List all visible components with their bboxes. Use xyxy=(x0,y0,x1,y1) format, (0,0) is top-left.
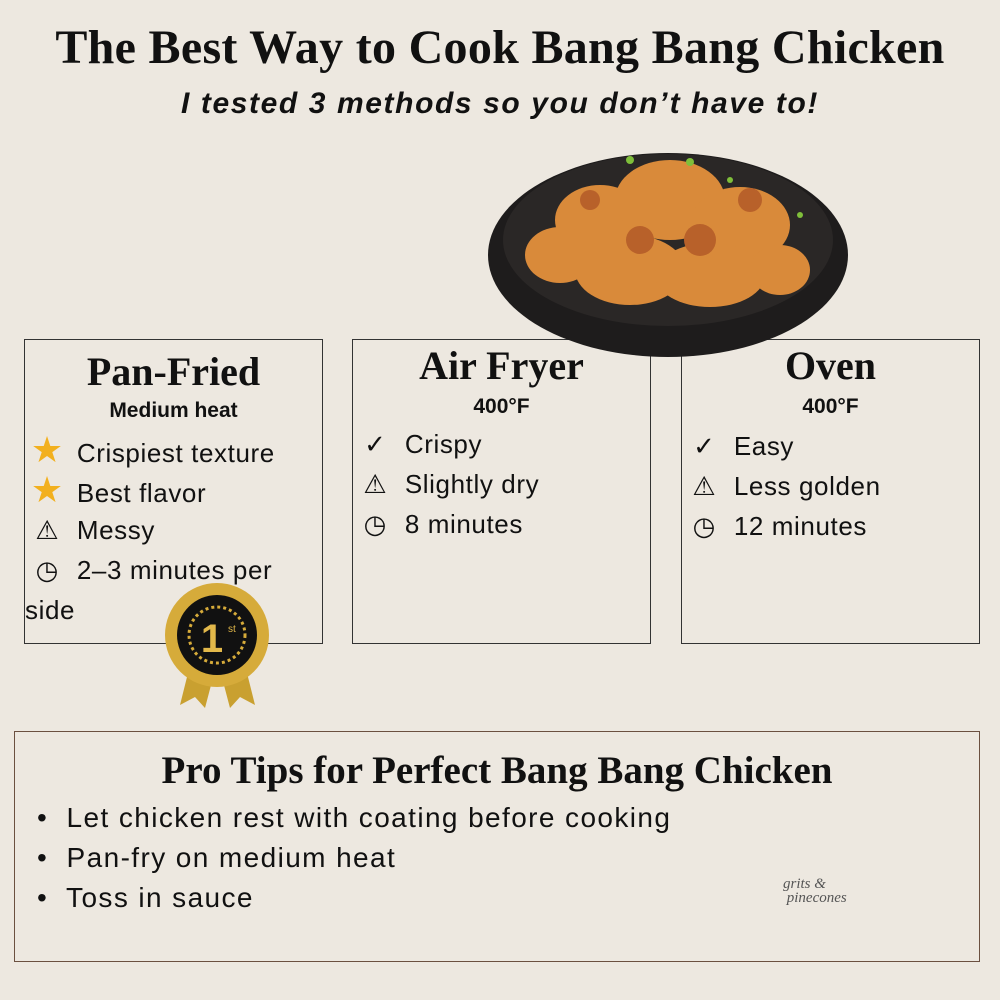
panel: air fryer: ◷ xyxy=(364,509,386,539)
tips list: • Let chicken rest with coating before cooking xyxy=(37,802,671,833)
panel: pro tips xyxy=(14,731,980,962)
panel: pan-fried: 2–3 minutes per xyxy=(77,555,272,585)
subtitle: I tested 3 methods so you don’t have to! xyxy=(181,87,819,120)
panel: air fryer: Slightly dry xyxy=(405,469,539,499)
panel: pan-fried: side xyxy=(25,595,75,625)
panel: pan-fried: ★ xyxy=(31,429,63,470)
tips list: • Pan-fry on medium heat xyxy=(37,842,396,873)
panel: oven: 400°F xyxy=(802,395,859,418)
panel: air fryer: Air Fryer xyxy=(419,343,584,388)
logo: grits & xyxy=(783,876,826,892)
title: The Best Way to Cook Bang Bang Chicken xyxy=(55,21,945,74)
panel: oven: Oven xyxy=(785,343,876,388)
image: bowl of chicken xyxy=(488,153,848,357)
panel: oven: Easy xyxy=(734,431,794,461)
panel: oven: ⚠ xyxy=(692,471,716,501)
panel: air fryer: 400°F xyxy=(473,395,530,418)
panel: pan-fried: Best flavor xyxy=(77,478,206,508)
badge: 1st place: 1 xyxy=(201,617,223,661)
panel: air fryer: 8 minutes xyxy=(405,509,523,539)
logo xyxy=(783,876,847,906)
panel: pan-fried: Messy xyxy=(77,515,155,545)
panel: oven: 12 minutes xyxy=(734,511,867,541)
badge: 1st place: st xyxy=(228,624,236,635)
panel: pan-fried: Crispiest texture xyxy=(77,438,275,468)
tips heading: Pro Tips for Perfect Bang Bang Chicken xyxy=(162,749,832,792)
panel: oven: Less golden xyxy=(734,471,881,501)
panel: pan-fried: Medium heat xyxy=(109,399,238,422)
tips list xyxy=(37,802,671,913)
panel: oven xyxy=(681,339,980,644)
panel: pan-fried: ◷ xyxy=(36,555,58,585)
panel: pan-fried: ★ xyxy=(31,469,63,510)
panel: pan-fried: Pan-Fried xyxy=(87,349,260,394)
panel: air fryer: Crispy xyxy=(405,429,482,459)
panel: pan-fried: ⚠ xyxy=(35,515,59,545)
panel: oven: ◷ xyxy=(693,511,715,541)
panel: air fryer: ⚠ xyxy=(363,469,387,499)
panel: oven: ✓ xyxy=(693,431,715,461)
panel: pan-fried xyxy=(24,339,323,644)
tips list: • Toss in sauce xyxy=(37,882,254,913)
panel: air fryer: ✓ xyxy=(364,429,386,459)
panel: air fryer xyxy=(352,339,651,644)
logo: pinecones xyxy=(787,890,847,906)
badge: 1st place xyxy=(165,583,269,708)
